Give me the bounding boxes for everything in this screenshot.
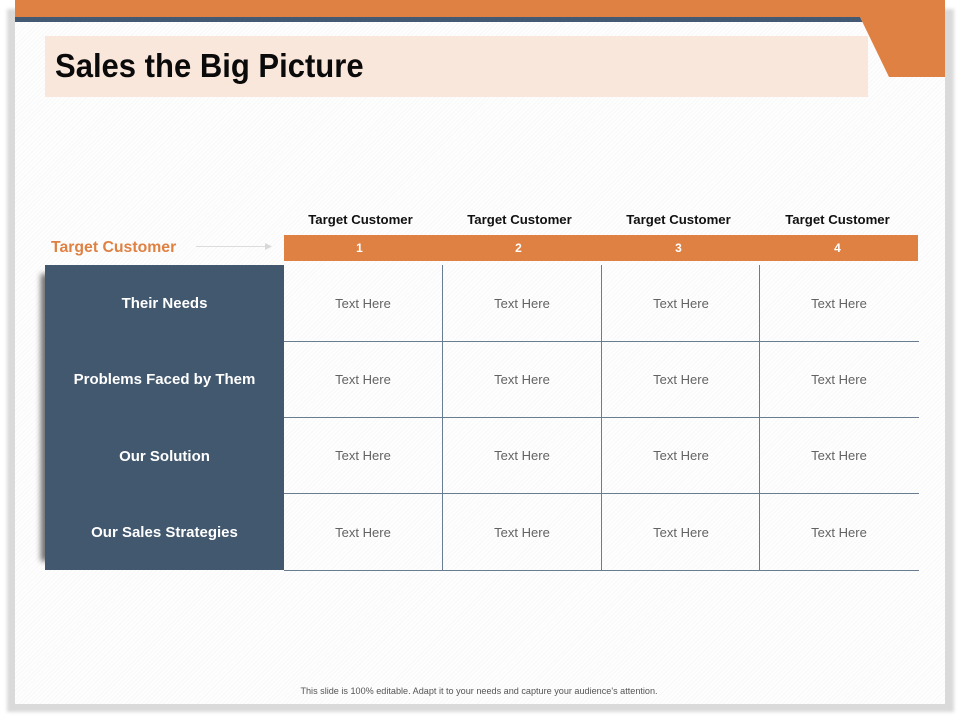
cell r4c2: Text Here <box>494 525 550 540</box>
cell r2c3: Text Here <box>653 372 709 387</box>
cell r3c4: Text Here <box>811 448 867 463</box>
cell r2c2: Text Here <box>494 372 550 387</box>
top orange banner <box>15 0 945 77</box>
row label: problems: Problems Faced by Them <box>74 371 255 388</box>
cell r2c1: Text Here <box>335 372 391 387</box>
cell r4c4: Text Here <box>811 525 867 540</box>
row label panel <box>45 265 284 570</box>
title panel <box>45 36 868 97</box>
cell r3c1: Text Here <box>335 448 391 463</box>
title: Sales the Big Picture <box>55 47 364 84</box>
column heading: customer 2: Target Customer <box>467 212 572 227</box>
column heading: customer 4: Target Customer <box>785 212 890 227</box>
cell r1c4: Text Here <box>811 296 867 311</box>
cell r1c2: Text Here <box>494 296 550 311</box>
row label: strategies: Our Sales Strategies <box>91 524 238 541</box>
number 2: 2 <box>515 241 522 255</box>
column heading: customer 1: Target Customer <box>308 212 413 227</box>
cell r4c1: Text Here <box>335 525 391 540</box>
orange number bar <box>284 235 918 261</box>
number 3: 3 <box>675 241 682 255</box>
cell r1c1: Text Here <box>335 296 391 311</box>
row label panel shadow <box>41 274 49 561</box>
number 4: 4 <box>834 241 841 255</box>
cell r1c3: Text Here <box>653 296 709 311</box>
footer note: This slide is 100% editable. Adapt it to your needs and capture your audience's attention. <box>300 686 658 696</box>
row label: solution: Our Solution <box>119 448 210 465</box>
row label: their needs: Their Needs <box>122 295 207 312</box>
number 1: 1 <box>356 241 363 255</box>
cell r4c3: Text Here <box>653 525 709 540</box>
cell r2c4: Text Here <box>811 372 867 387</box>
row label: target customer: Target Customer <box>51 239 176 256</box>
arrow <box>196 243 272 250</box>
cell r3c2: Text Here <box>494 448 550 463</box>
column heading: customer 3: Target Customer <box>626 212 731 227</box>
cell r3c3: Text Here <box>653 448 709 463</box>
